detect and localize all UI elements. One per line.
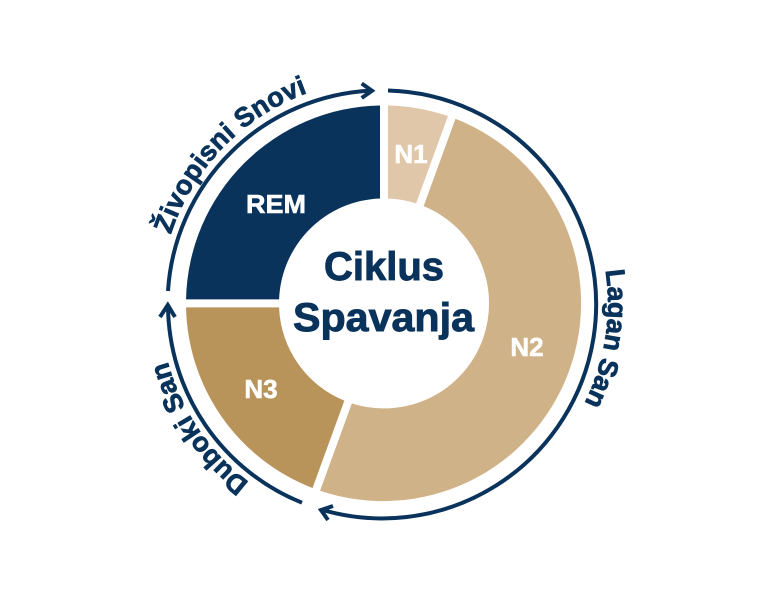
label: REM: REM (246, 189, 306, 219)
arc label: Lagan San: Lagan San (584, 270, 626, 407)
segment: N3 (186, 307, 344, 488)
center title: Spavanja (293, 296, 475, 340)
center title: Ciklus (324, 245, 444, 289)
label: N1: N1 (394, 139, 428, 169)
arrow: light sleep arc (321, 90, 596, 520)
arrow: deep sleep arc (160, 305, 302, 503)
arc label: Duboki San: Duboki San (154, 362, 248, 496)
segment: REM (186, 105, 380, 299)
segment: N1 (388, 105, 448, 203)
label: N2: N2 (510, 332, 544, 362)
segment: N2 (320, 119, 581, 501)
label: N3: N3 (244, 374, 278, 404)
center title (293, 245, 475, 340)
arc label: Živopisni Snovi: Živopisni Snovi (148, 74, 306, 234)
arrow: vivid dreams arc (168, 84, 372, 291)
